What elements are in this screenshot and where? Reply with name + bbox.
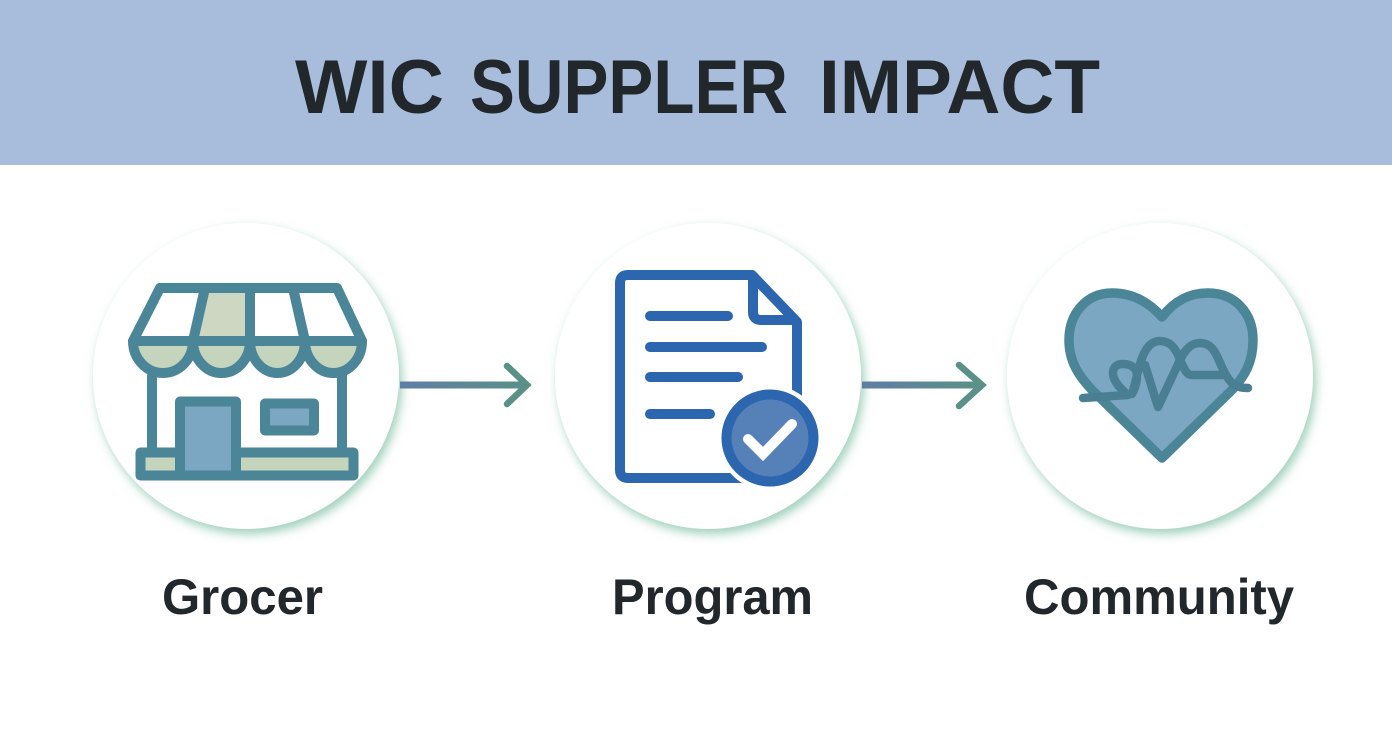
- check badge: [717, 385, 823, 491]
- document outline: [620, 275, 797, 478]
- panel: program: [555, 223, 861, 625]
- circle: grocer: [93, 223, 399, 529]
- base: [140, 452, 354, 476]
- title: WIC: [295, 45, 444, 130]
- label: community: Community: [1024, 569, 1294, 625]
- heart: [1069, 293, 1253, 458]
- title: IMPACT: [819, 45, 1100, 130]
- window: [265, 404, 314, 430]
- icon: document with check: [620, 275, 823, 491]
- awning scallops: [133, 341, 362, 373]
- pulse line: [1083, 341, 1248, 407]
- arrow: program to community: [862, 365, 982, 406]
- icon: storefront: [133, 288, 362, 476]
- arrow: grocer to program: [400, 366, 527, 404]
- title: SUPPLER: [470, 45, 788, 130]
- title: [295, 45, 1100, 130]
- label: grocer: Grocer: [162, 569, 323, 625]
- circle: community: [1007, 223, 1313, 529]
- circle: program: [555, 223, 861, 529]
- door: [180, 402, 236, 476]
- icon: heart with pulse: [1069, 293, 1253, 458]
- label: program: Program: [612, 569, 813, 625]
- panel: grocer: [93, 223, 399, 625]
- text lines: [650, 316, 762, 414]
- posts: [152, 376, 342, 452]
- awning top panels: [133, 288, 362, 341]
- header banner: [0, 0, 1392, 165]
- page fold: [753, 275, 797, 320]
- panel: community: [1007, 223, 1313, 625]
